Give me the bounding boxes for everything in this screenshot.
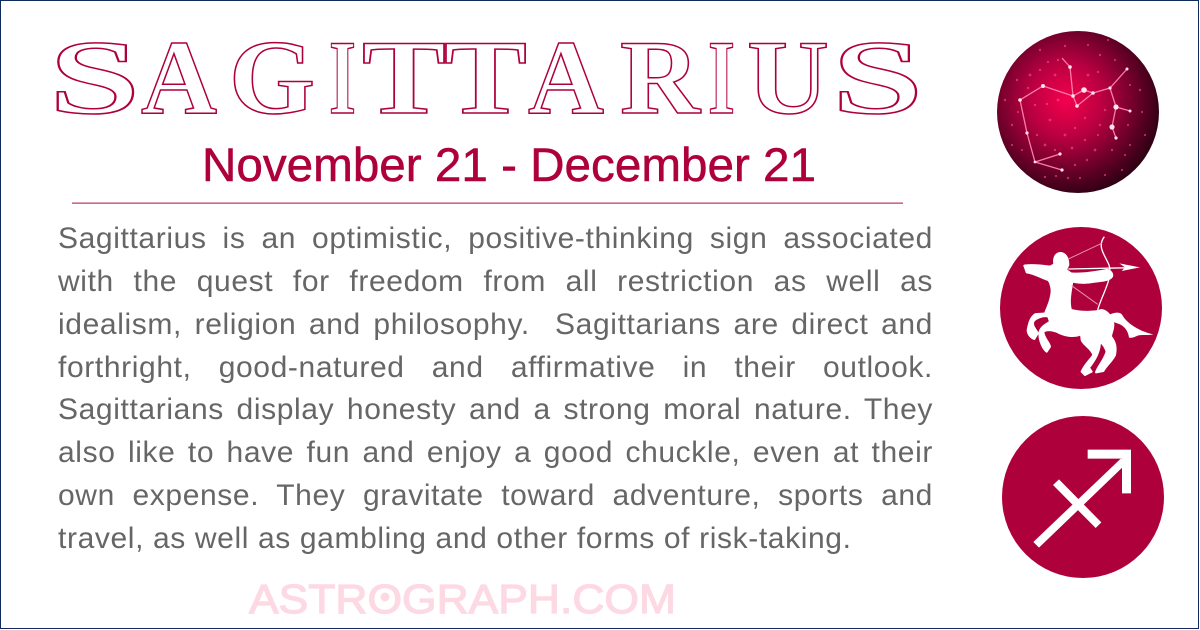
title: S xyxy=(49,19,140,136)
title: T xyxy=(362,19,446,136)
body text: idealism, religion and philosophy. Sagittarians are direct and xyxy=(58,308,933,341)
body text: with the quest for freedom from all restriction as well as xyxy=(58,265,933,298)
title: T xyxy=(444,19,527,136)
title xyxy=(49,19,923,136)
body text xyxy=(58,222,933,555)
body text: Sagittarius is an optimistic, positive-thinking sign associated xyxy=(58,222,933,255)
body text: forthright, good-natured and affirmative in their outlook. xyxy=(58,351,933,384)
title: A xyxy=(528,19,604,136)
watermark: ASTROGRAPH.COM xyxy=(249,576,676,622)
icon: sagittarius glyph xyxy=(1002,416,1164,578)
title: S xyxy=(832,19,923,136)
body text: Sagittarians display honesty and a strong moral nature. They xyxy=(58,393,933,426)
title: I xyxy=(329,19,356,136)
title: A xyxy=(141,19,217,136)
title: R xyxy=(620,19,702,136)
body text: also like to have fun and enjoy a good chuckle, even at their xyxy=(58,436,933,469)
icon: constellation globe xyxy=(997,31,1159,193)
title: I xyxy=(708,19,735,136)
icon: centaur archer xyxy=(1000,227,1162,389)
body text: own expense. They gravitate toward adventure, sports and xyxy=(58,479,933,512)
title: G xyxy=(229,19,315,136)
body text: travel, as well as gambling and other forms of risk-taking. xyxy=(58,522,852,555)
date range: November 21 - December 21 xyxy=(202,138,816,191)
title: U xyxy=(747,19,829,136)
